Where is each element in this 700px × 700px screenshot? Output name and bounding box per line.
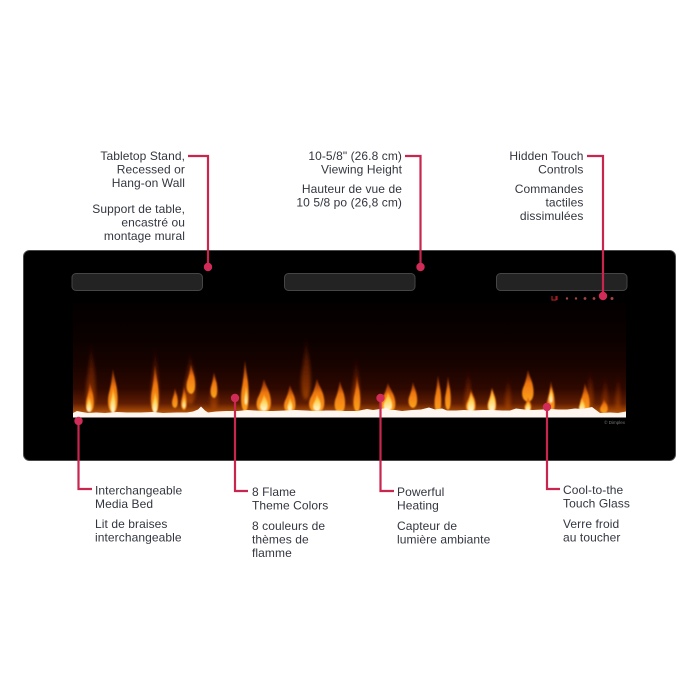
panel: fireplace bbox=[24, 250, 676, 460]
callout: viewing height: Viewing Height bbox=[321, 162, 403, 176]
callout: tabletop stand bbox=[92, 149, 212, 271]
callout: interchangeable media bed: Interchangeable bbox=[95, 484, 183, 498]
callout: viewing height bbox=[296, 149, 425, 271]
callout: interchangeable media bed: Lit de braises bbox=[95, 517, 168, 531]
callout: cool-to-the-touch glass: Touch Glass bbox=[563, 496, 630, 510]
callout: hidden touch controls: dissimulées bbox=[520, 209, 584, 223]
callout: flame colors: flamme bbox=[252, 546, 292, 560]
callout: powerful heating bbox=[376, 394, 491, 546]
callout: flame colors: 8 couleurs de bbox=[252, 519, 325, 533]
speaker vent: center bbox=[284, 274, 415, 290]
touch controls bbox=[552, 296, 614, 300]
callout: viewing height: 10 5/8 po (26,8 cm) bbox=[296, 196, 402, 210]
callout: cool-to-the-touch glass bbox=[543, 403, 630, 544]
callout: hidden touch controls: Commandes bbox=[515, 182, 584, 196]
brand mark: © Dimplex bbox=[604, 419, 626, 425]
callout: tabletop stand: Hang-on Wall bbox=[112, 176, 185, 190]
callout: cool-to-the-touch glass: au toucher bbox=[563, 530, 621, 544]
callout: flame colors: 8 Flame bbox=[252, 485, 296, 499]
speaker vent: right bbox=[496, 274, 627, 290]
callout: tabletop stand: Recessed or bbox=[117, 162, 185, 176]
callout: interchangeable media bed: interchangeable bbox=[95, 530, 182, 544]
callout: viewing height: Hauteur de vue de bbox=[302, 182, 402, 196]
callout: interchangeable media bed: Media Bed bbox=[95, 497, 153, 511]
callout: tabletop stand: Support de table, bbox=[92, 202, 185, 216]
callout: viewing height: 10-5/8" (26.8 cm) bbox=[308, 149, 402, 163]
callout: hidden touch controls bbox=[509, 149, 607, 300]
callout: powerful heating: Capteur de bbox=[397, 519, 457, 533]
callout: hidden touch controls: Hidden Touch bbox=[509, 149, 584, 163]
callout: flame colors: Theme Colors bbox=[252, 498, 328, 512]
callout: cool-to-the-touch glass: Cool-to-the bbox=[563, 483, 623, 497]
callout: powerful heating: Powerful bbox=[397, 485, 444, 499]
callout: interchangeable media bed bbox=[74, 417, 183, 544]
callout: hidden touch controls: Controls bbox=[538, 162, 584, 176]
callout: powerful heating: Heating bbox=[397, 498, 439, 512]
callout: cool-to-the-touch glass: Verre froid bbox=[563, 517, 619, 531]
media bed bbox=[73, 406, 626, 418]
callout: flame colors: thèmes de bbox=[252, 532, 309, 546]
callout: tabletop stand: Tabletop Stand, bbox=[100, 149, 185, 163]
callout: hidden touch controls: tactiles bbox=[546, 196, 584, 210]
callout: flame colors bbox=[231, 394, 328, 560]
callout: tabletop stand: encastré ou bbox=[121, 216, 185, 230]
callout: powerful heating: lumière ambiante bbox=[397, 532, 491, 546]
callout: tabletop stand: montage mural bbox=[104, 229, 185, 243]
firebox with flames bbox=[73, 303, 626, 418]
speaker vent: left bbox=[72, 274, 202, 290]
